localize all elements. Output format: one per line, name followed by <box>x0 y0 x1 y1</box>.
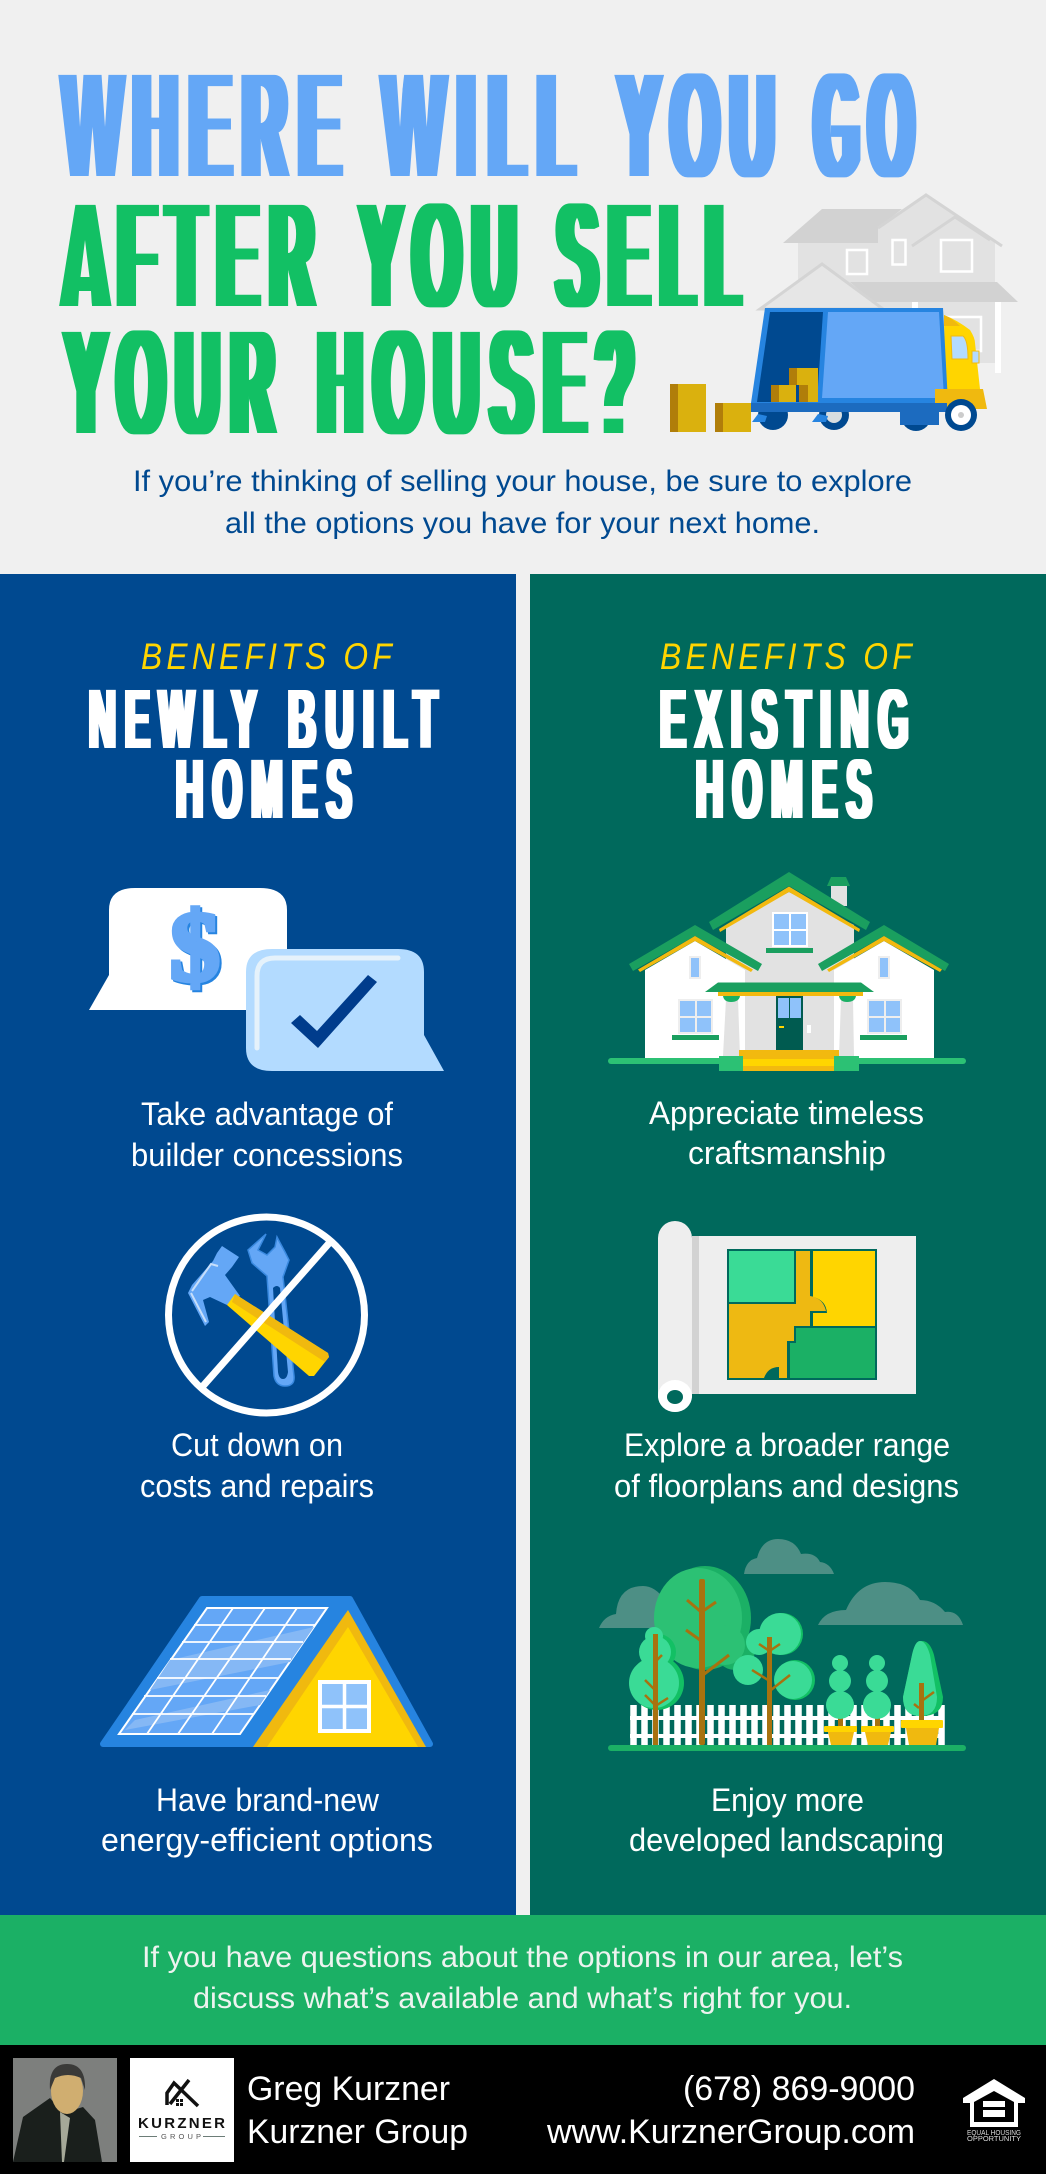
text: builder concessions: builder concessions <box>131 1137 403 1173</box>
text: craftsmanship: craftsmanship <box>688 1135 886 1171</box>
company logo <box>130 2058 234 2162</box>
title: WILL <box>385 44 585 208</box>
text: developed landscaping: developed landscaping <box>629 1822 944 1858</box>
title: AFTER <box>66 174 327 338</box>
illustration: moving truck with boxes <box>670 308 987 432</box>
agent name <box>247 2070 468 2151</box>
heading: newly built homes: NEWLY <box>89 672 265 766</box>
heading: newly built homes <box>89 636 447 836</box>
panel: benefits of existing homes <box>530 574 1046 1917</box>
text: craftsmanship <box>649 1095 924 1171</box>
text: costs and repairs <box>140 1427 374 1504</box>
icon: equal housing opportunity: EQUAL HOUSING <box>967 2130 1021 2137</box>
panel: benefits of newly built homes <box>0 574 516 1917</box>
text: floorplans and designs <box>614 1427 959 1504</box>
icon: solar panel roof <box>103 1599 430 1747</box>
text: energy efficient options: energy-efficient options <box>101 1822 433 1858</box>
text: floorplans and designs: of floorplans and designs <box>614 1468 959 1504</box>
contact details: (678) 869-9000 <box>683 2070 915 2108</box>
icon: landscaping with trees and fence <box>599 1539 966 1751</box>
callout band <box>0 1915 1046 2045</box>
text: energy efficient options <box>101 1782 433 1858</box>
text: builder concessions: Take advantage of <box>141 1096 393 1132</box>
contact details <box>546 2070 915 2151</box>
subtitle: If you’re thinking of selling your house, be sure to explore <box>133 465 912 498</box>
subtitle <box>133 465 912 540</box>
icon: equal housing opportunity <box>963 2079 1025 2143</box>
text: costs and repairs: Cut down on <box>171 1427 343 1463</box>
icon: equal housing opportunity: OPPORTUNITY <box>967 2136 1021 2143</box>
heading: existing homes: BENEFITS OF <box>660 636 916 677</box>
text: builder concessions <box>131 1096 403 1173</box>
text: developed landscaping: Enjoy more <box>711 1782 864 1818</box>
agent photo <box>13 2058 117 2162</box>
company logo: KURZNER <box>138 2115 225 2132</box>
title: YOU <box>620 44 787 208</box>
text: energy efficient options: Have brand-new <box>156 1782 380 1818</box>
icon: speech bubbles with dollar and check: $ <box>170 891 220 1002</box>
company logo: GROUP <box>161 2132 201 2141</box>
panel: benefits of newly built homes: BUILT <box>288 672 447 766</box>
callout band: discuss what’s available and what’s right for you. <box>193 1982 852 2015</box>
text: costs and repairs: costs and repairs <box>140 1468 374 1504</box>
contact details: www.KurznerGroup.com <box>546 2113 915 2151</box>
callout band: If you have questions about the options in our area, let’s <box>142 1941 903 1974</box>
text: floorplans and designs: Explore a broader range <box>624 1427 950 1463</box>
text: developed landscaping <box>629 1782 944 1858</box>
agent name: Greg Kurzner <box>247 2070 450 2108</box>
title: YOU <box>362 174 529 338</box>
icon: no tools <box>168 1217 364 1413</box>
subtitle: all the options you have for your next home. <box>225 507 820 540</box>
title <box>65 44 925 465</box>
footer <box>0 2045 1046 2174</box>
icon: speech bubbles with dollar and check: $ <box>172 893 222 1004</box>
title: WHERE <box>65 44 353 208</box>
icon: floorplan blueprint <box>658 1221 916 1412</box>
heading: newly built homes: BENEFITS OF <box>141 636 396 677</box>
text: craftsmanship: Appreciate timeless <box>649 1095 924 1131</box>
icon: speech bubbles with dollar and check <box>89 888 444 1071</box>
illustration: gray house behind truck <box>760 195 1018 373</box>
heading: newly built homes: HOMES <box>176 742 361 836</box>
agent name: Kurzner Group <box>247 2113 468 2151</box>
icon: craftsman house <box>608 872 966 1071</box>
heading: existing homes <box>660 636 918 836</box>
title: YOUR <box>67 301 287 465</box>
header panel <box>65 44 1018 540</box>
